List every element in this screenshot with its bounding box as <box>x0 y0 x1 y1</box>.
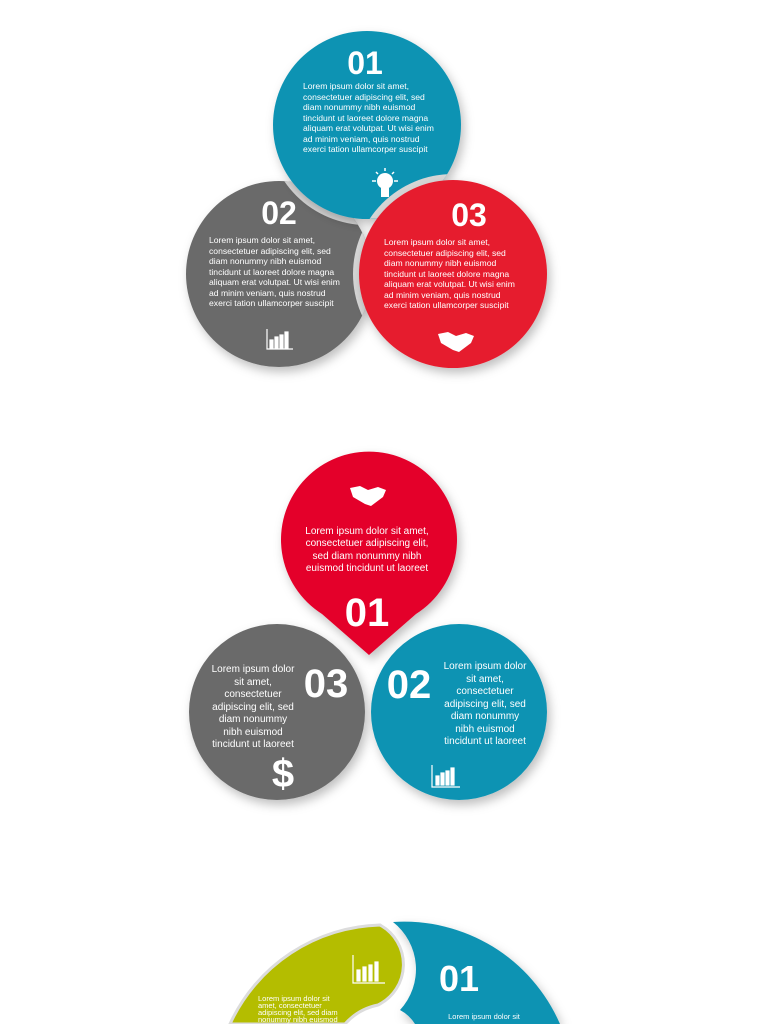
circle 03 gray: nibh euismod <box>223 727 283 738</box>
circle 01 blue: exerci tation ullamcorper suscipit <box>303 144 428 154</box>
segment blue 01: Lorem ipsum dolor sit <box>448 1012 521 1021</box>
circle 02 blue: sit amet, <box>466 674 504 685</box>
icon: chart <box>353 955 385 983</box>
icon: handshake <box>350 486 386 506</box>
circle 02 gray <box>186 181 372 367</box>
circle 01 blue: aliquam erat volutpat. Ut wisi enim <box>303 123 434 133</box>
circle 03 red: tincidunt ut laoreet dolore magna <box>384 269 509 279</box>
drop 01 red: consectetuer adipiscing elit, <box>306 538 428 549</box>
circle 02 blue: adipiscing elit, sed <box>444 699 526 710</box>
circle 03 red: diam nonummy nibh euismod <box>384 258 496 268</box>
circle 03 red: ad minim veniam, quis nostrud <box>384 290 501 300</box>
icon: chart <box>267 329 293 349</box>
circle 03 red: exerci tation ullamcorper suscipit <box>384 300 509 310</box>
circle 02 blue: nibh euismod <box>455 724 515 735</box>
circle 01 blue: diam nonummy nibh euismod <box>303 102 415 112</box>
segment olive: amet, consectetuer <box>258 1001 322 1010</box>
circle 03 red: 03 <box>451 197 487 233</box>
segment olive: nonummy nibh euismod <box>258 1015 338 1024</box>
icon: handshake <box>438 332 474 352</box>
drop 01 red <box>278 452 462 664</box>
circle 03 gray: diam nonummy <box>219 714 287 725</box>
circle 03 red: aliquam erat volutpat. Ut wisi enim <box>384 279 515 289</box>
circle 01 blue: Lorem ipsum dolor sit amet, <box>303 81 409 91</box>
drop 01 red: 01 <box>345 591 389 635</box>
circle 03 gray: consectetuer <box>224 689 282 700</box>
icon: dollar: $ <box>272 752 294 796</box>
circle 03 red <box>353 174 553 374</box>
drop 01 red: sed diam nonummy nibh <box>313 551 421 562</box>
circle 02 gray: aliquam erat volutpat. Ut wisi enim <box>209 277 340 287</box>
circle 03 gray: 03 <box>304 662 348 706</box>
circle 02 blue: diam nonummy <box>451 711 519 722</box>
circle 02 gray: Lorem ipsum dolor sit amet, <box>209 235 315 245</box>
icon: chart <box>432 765 460 787</box>
circle 02 gray: 02 <box>261 195 297 231</box>
segment olive <box>230 925 403 1024</box>
circle 03 gray: Lorem ipsum dolor <box>212 664 295 675</box>
circle 02 gray: exerci tation ullamcorper suscipit <box>209 298 334 308</box>
circle 02 gray: ad minim veniam, quis nostrud <box>209 288 326 298</box>
circle 03 red: consectetuer adipiscing elit, sed <box>384 248 506 258</box>
diagram 2: drop and two circles <box>189 452 547 800</box>
icon: bulb <box>372 168 398 197</box>
circle 03 gray <box>189 624 365 800</box>
circle 02 gray: diam nonummy nibh euismod <box>209 256 321 266</box>
drop 01 red: Lorem ipsum dolor sit amet, <box>305 526 429 537</box>
circle 03 red: Lorem ipsum dolor sit amet, <box>384 237 490 247</box>
circle 02 gray: tincidunt ut laoreet dolore magna <box>209 267 334 277</box>
drop 01 red: euismod tincidunt ut laoreet <box>306 563 428 574</box>
circle 01 blue: ad minim veniam, quis nostrud <box>303 134 420 144</box>
diagram 1: three overlapping circles <box>186 25 553 374</box>
circle 02 blue <box>371 624 547 800</box>
circle 01 blue: consectetuer adipiscing elit, sed <box>303 92 425 102</box>
segment blue 01: 01 <box>439 958 479 999</box>
segment olive: Lorem ipsum dolor sit <box>258 994 331 1003</box>
circle 03 gray: sit amet, <box>234 677 272 688</box>
segment blue 01 <box>393 922 560 1024</box>
circle 02 blue: Lorem ipsum dolor <box>444 661 527 672</box>
circle 01 blue: tincidunt ut laoreet dolore magna <box>303 113 428 123</box>
circle 02 blue: 02 <box>387 663 431 707</box>
circle 01 blue <box>267 25 467 225</box>
circle 02 blue: tincidunt ut laoreet <box>444 736 526 747</box>
diagram 3: partial cycle <box>230 922 560 1024</box>
circle 02 gray: consectetuer adipiscing elit, sed <box>209 246 331 256</box>
circle 03 gray: tincidunt ut laoreet <box>212 739 294 750</box>
segment olive: adipiscing elit, sed diam <box>258 1008 338 1017</box>
circle 01 blue: 01 <box>347 45 383 81</box>
circle 03 gray: adipiscing elit, sed <box>212 702 294 713</box>
circle 02 blue: consectetuer <box>456 686 514 697</box>
